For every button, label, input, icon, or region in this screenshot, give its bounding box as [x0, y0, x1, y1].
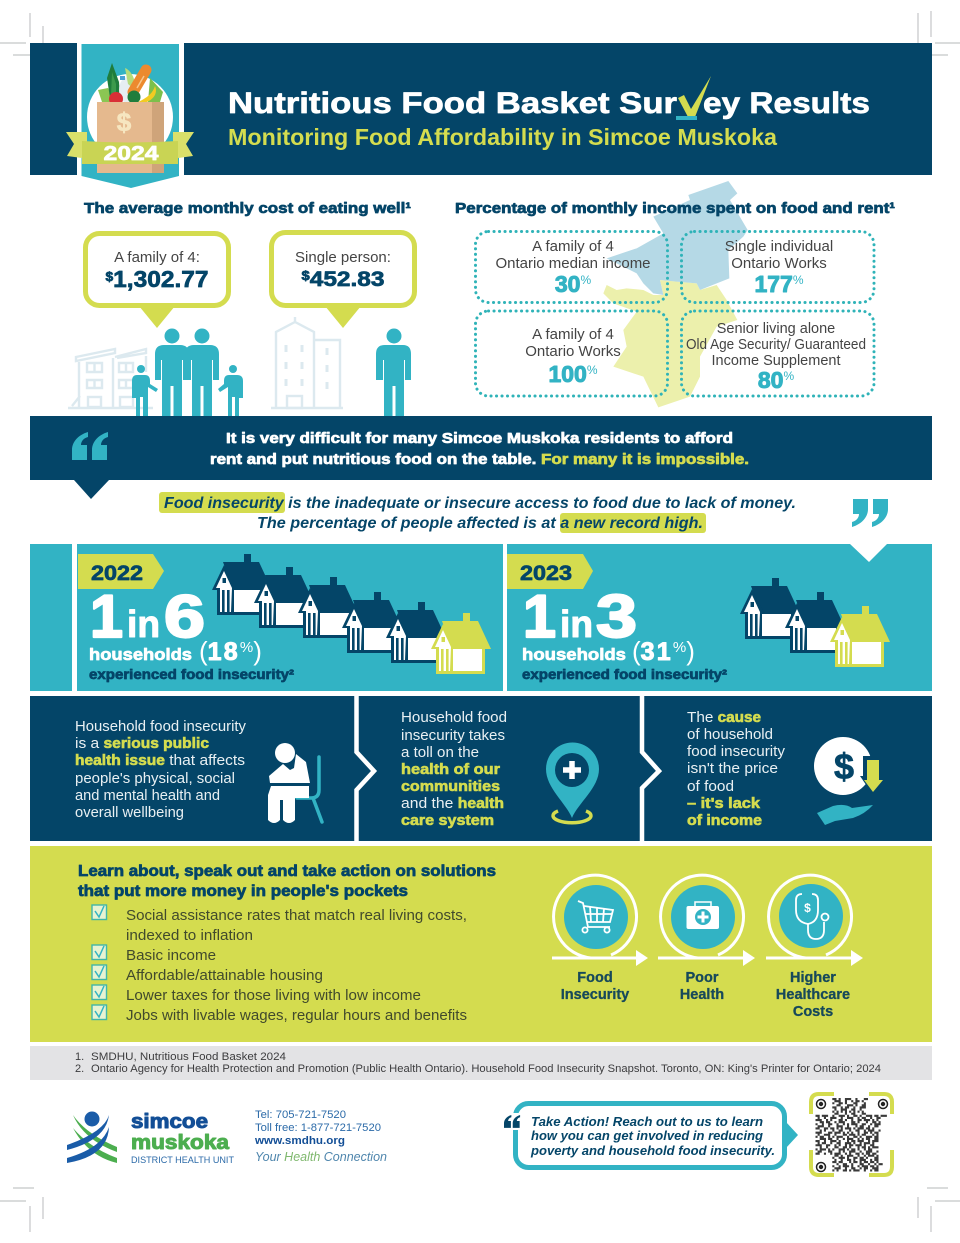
badge: 2024 grocery bag [66, 43, 194, 189]
icon: single person [376, 328, 411, 416]
quote band: It is very difficult for many Simcoe Muskoka residents to afford [226, 431, 733, 447]
panel: single person cost bubble: Single person: [295, 249, 391, 266]
panel: senior living alone: % [783, 369, 794, 383]
icon: location pin with plus [546, 742, 599, 823]
panel: public health issue: health issue that affects [75, 753, 245, 769]
checklist: Jobs with livable wages, regular hours and benefits [126, 1008, 467, 1024]
quote band [30, 416, 932, 499]
icon: row of houses, 1 in 6 [212, 554, 491, 674]
cycle: food insecurity: Food [577, 970, 613, 986]
panel: single person cost bubble: 452.83 [310, 267, 385, 291]
panel: senior living alone: Senior living alone [717, 321, 835, 337]
panel: toll on communities: a toll on the [401, 745, 479, 761]
footnotes [30, 1046, 932, 1080]
panel: family of 4 Ontario Works: A family of 4 [532, 326, 614, 343]
panel: family of 4 cost bubble: $ [106, 269, 114, 284]
take action callout: Take Action! Reach out to us to learn [531, 1115, 763, 1129]
stat: 1 in 3: 3 [596, 583, 637, 650]
panel: single individual Ontario Works: % [793, 273, 804, 287]
footnotes: SMDHU, Nutritious Food Basket 2024 [91, 1051, 286, 1063]
subtitle: Monitoring Food Affordability in Simcoe Muskoka [228, 124, 777, 150]
panel: family of 4 Ontario Works: % [587, 363, 598, 377]
footnotes: 2. [75, 1063, 84, 1075]
panel: public health issue: is a serious public [75, 736, 209, 752]
panel: senior living alone: Income Supplement [712, 353, 840, 369]
panel: cause is lack of income: – it's lack [687, 796, 761, 812]
chevrons between panels [356, 696, 374, 841]
food insecurity definition: The percentage of people affected is at a new record high. [257, 515, 703, 532]
title: Nutritious Food Basket Sur [228, 87, 677, 120]
checklist: Affordable/attainable housing [126, 968, 323, 984]
households 18 percent: households [89, 645, 192, 664]
cycle: higher healthcare costs: Healthcare [776, 987, 850, 1003]
solutions heading [78, 863, 496, 900]
panel: single individual Ontario Works: 177 [754, 271, 793, 297]
households 18 percent: ) [253, 636, 262, 666]
households 18 percent [89, 636, 262, 666]
year tag 2023 [507, 554, 593, 589]
checklist [92, 905, 467, 1024]
experienced text: experienced food insecurity² [89, 667, 295, 682]
quote band: rent and put nutritious food on the table. For many it is impossible. [210, 452, 749, 468]
stat: 1 in 3 [523, 583, 637, 650]
stat: 1 in 6: 1 [90, 583, 123, 650]
panel: senior living alone: 80 [758, 367, 783, 393]
panel: 2023 [507, 544, 932, 691]
panel: family of 4 median income: % [580, 273, 591, 287]
households 31 percent: households [522, 645, 626, 664]
map of Simcoe Muskoka [603, 181, 748, 407]
solutions heading: Learn about, speak out and take action on solutions [78, 863, 496, 880]
year tag 2022 [78, 554, 164, 589]
panel: public health issue: and mental health and [75, 788, 220, 804]
footnotes: Ontario Agency for Health Protection and Promotion (Public Health Ontario). Household Food Insecurity Snapshot. Toronto, ON: King's Printer for Ontario; 2024 [91, 1063, 881, 1075]
panel: family of 4 Ontario Works: Ontario Works [525, 343, 621, 360]
cycle: higher healthcare costs: Higher [790, 970, 836, 986]
experienced text: experienced food insecurity² [522, 667, 728, 682]
icon: falling dollar over hand [814, 737, 887, 825]
panel: cause is lack of income [640, 696, 932, 841]
year tag 2023: 2023 [520, 562, 572, 585]
heading: percentage of income: Percentage of monthly income spent on food and rent¹ [455, 200, 895, 217]
panel: senior living alone [682, 311, 874, 396]
panel: cause is lack of income: of food [687, 779, 734, 795]
checklist: Lower taxes for those living with low income [126, 988, 421, 1004]
logo: Simcoe Muskoka District Health Unit: muskoka [131, 1131, 230, 1154]
checklist: indexed to inflation [126, 928, 253, 944]
solutions heading: that put more money in people's pockets [78, 883, 408, 900]
panel: cause is lack of income: food insecurity [687, 744, 786, 760]
panel: family of 4 cost bubble [86, 234, 228, 328]
take action callout: poverty and household food insecurity. [530, 1144, 775, 1158]
stat: 1 in 6: 6 [164, 583, 205, 650]
cycle: food insecurity: Insecurity [561, 987, 629, 1003]
icon: family of four [132, 328, 243, 416]
panel: family of 4 cost bubble: 1,302.77 [113, 266, 208, 292]
panel: family of 4 median income: Ontario median income [495, 255, 651, 272]
take action callout [503, 1104, 798, 1168]
icon: opening quote [72, 432, 108, 460]
panel: family of 4 median income: A family of 4 [532, 238, 614, 255]
icon: stethoscope [796, 894, 828, 939]
panel: toll on communities [355, 696, 640, 841]
icon: row of houses, 1 in 3 [740, 578, 890, 667]
contact details: Tel: 705-721-7520 [255, 1109, 346, 1121]
logo: Simcoe Muskoka District Health Unit: DISTRICT HEALTH UNIT [131, 1155, 234, 1166]
panel: toll on communities: insecurity takes [401, 728, 505, 744]
checklist: Basic income [126, 948, 216, 964]
icon: first aid kit [686, 902, 719, 929]
panel: cause is lack of income: of income [687, 813, 762, 829]
panel: single person cost bubble [272, 232, 414, 328]
cycle: higher healthcare costs [766, 875, 863, 1020]
households 18 percent: % [240, 639, 253, 656]
logo: Simcoe Muskoka District Health Unit [67, 1110, 234, 1166]
stat: 1 in 6 [90, 583, 205, 650]
icon: logo swooshes [67, 1112, 117, 1163]
QR code [811, 1094, 892, 1175]
households 31 percent: (31 [632, 636, 671, 666]
food insecurity definition [159, 492, 796, 533]
title: ey Results [703, 87, 870, 120]
food insecurity definition: Food insecurity is the inadequate or insecure access to food due to lack of money. [164, 495, 796, 512]
footnotes: 1. [75, 1051, 84, 1063]
panel: toll on communities: Household food [401, 710, 507, 726]
panel: senior living alone: Old Age Security/ Guaranteed [686, 337, 866, 353]
cycle: higher healthcare costs: Costs [793, 1004, 833, 1020]
icon: falling dollar over hand: $ [834, 746, 854, 787]
icon: shopping cart [578, 901, 613, 933]
panel: public health issue: overall wellbeing [75, 805, 184, 821]
panel: cause is lack of income: of household [687, 727, 773, 743]
title [228, 76, 870, 120]
icon: stethoscope: $ [804, 901, 811, 915]
households 31 percent [522, 636, 695, 666]
panel: family of 4 Ontario Works: 100 [548, 361, 587, 387]
stat: 1 in 3: in [560, 604, 593, 646]
icon: row houses [68, 349, 153, 408]
panel: public health issue [30, 696, 355, 841]
panel: family of 4 cost bubble: A family of 4: [114, 249, 200, 266]
households 31 percent: ) [686, 636, 695, 666]
stat: 1 in 3: 1 [523, 583, 556, 650]
panel: cause is lack of income: The cause [687, 710, 761, 726]
icon: distressed person on chair [268, 743, 322, 823]
stat: 1 in 6: in [127, 604, 160, 646]
contact details: Toll free: 1-877-721-7520 [255, 1122, 381, 1134]
logo: Simcoe Muskoka District Health Unit: simcoe [131, 1110, 208, 1133]
panel: cause is lack of income: isn't the price [687, 761, 778, 777]
panel: take action on solutions [30, 846, 932, 1042]
panel: family of 4 median income: 30 [555, 271, 580, 297]
year tag 2022: 2022 [91, 562, 143, 585]
panel: public health issue: Household food insecurity [75, 719, 247, 735]
checklist: Social assistance rates that match real living costs, [126, 908, 467, 924]
panel: single individual Ontario Works: Single individual [725, 238, 833, 255]
panel: public health issue: people's physical, social [75, 771, 235, 787]
contact details: Your Health Connection [255, 1149, 387, 1164]
heading: monthly cost: The average monthly cost of eating well¹ [84, 200, 411, 217]
panel: single individual Ontario Works: Ontario Works [731, 255, 827, 272]
panel: toll on communities: care system [401, 813, 494, 829]
panel: toll on communities: and the health [401, 796, 504, 812]
households 18 percent: (18 [199, 636, 238, 666]
panel: 2022 [30, 544, 503, 691]
panel: toll on communities: communities [401, 779, 500, 795]
cycle: poor health: Poor [685, 970, 719, 986]
panel: toll on communities: health of our [401, 762, 500, 778]
icon: closing quote [852, 499, 888, 527]
header banner [30, 43, 932, 189]
take action callout: how you can get involved in reducing [531, 1129, 763, 1143]
panel: family of 4 Ontario Works [476, 311, 668, 396]
households 31 percent: % [673, 639, 686, 656]
badge: 2024 grocery bag: 2024 [104, 143, 160, 165]
badge: 2024 grocery bag: $ [117, 107, 132, 137]
panel: family of 4 median income [476, 232, 668, 302]
contact details [254, 1109, 387, 1164]
panel: single person cost bubble: $ [302, 268, 311, 283]
cycle: food insecurity [552, 875, 648, 1003]
cycle: poor health: Health [680, 987, 724, 1003]
cycle: poor health [658, 875, 755, 1003]
panel: single individual Ontario Works [682, 232, 874, 302]
icon: callout quote [504, 1115, 520, 1128]
contact details: www.smdhu.org [254, 1135, 345, 1147]
icon: apartment tower [271, 317, 343, 408]
